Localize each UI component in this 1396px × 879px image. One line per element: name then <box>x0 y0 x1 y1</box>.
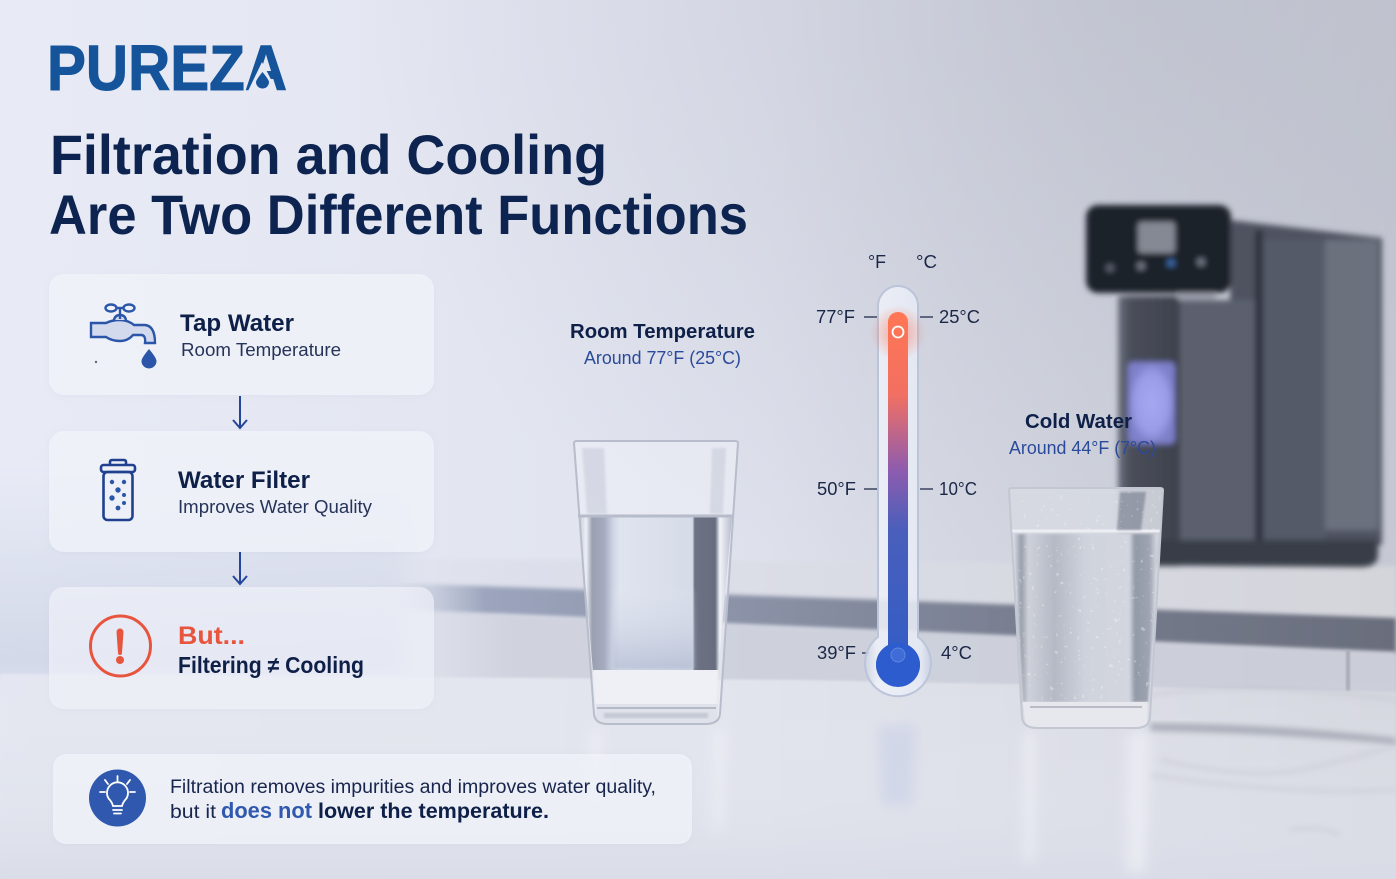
text: improves water quality: Improves Water Quality <box>178 497 372 517</box>
marble veins <box>1150 689 1396 835</box>
label: cold water: Around 44°F (7°C) <box>1009 438 1156 458</box>
blurred water dispenser appliance <box>1086 205 1382 567</box>
callout: filtration does not lower temperature: but it <box>170 802 217 823</box>
thermometer scale labels: 77°F <box>816 307 855 327</box>
label: room temperature: Room Temperature <box>570 321 755 343</box>
icon: warning exclamation <box>90 616 150 676</box>
heading: water filter: Water Filter <box>178 467 310 494</box>
thermometer scale labels: 25°C <box>939 307 980 327</box>
condensation droplets <box>1016 490 1160 700</box>
text: callout message: Filtration removes impurities and improves water quality, <box>170 777 656 798</box>
glass reflections <box>590 730 1150 872</box>
logo: PUREZA: PUREZA <box>47 32 287 104</box>
arrow: filter to warning <box>233 552 247 584</box>
label: cold water <box>1009 411 1156 458</box>
label: room temperature <box>570 321 755 368</box>
label: room temperature: Around 77°F (25°C) <box>584 348 741 368</box>
thermometer scale labels: 50°F <box>817 479 856 499</box>
panel: tap water <box>49 274 434 395</box>
heading: tap water: Tap Water <box>180 310 294 337</box>
thermometer scale labels: 10°C <box>939 479 977 499</box>
text: room temperature: Room Temperature <box>181 340 341 360</box>
callout: filtration does not lower temperature <box>53 754 692 844</box>
label: cold water: Cold Water <box>1025 411 1132 433</box>
title <box>49 123 748 246</box>
glass: cold water <box>1005 488 1165 728</box>
thermometer scale labels: 4°C <box>941 643 972 663</box>
thermometer scale labels: °C <box>916 252 937 272</box>
icon: light bulb <box>89 770 146 826</box>
callout: filtration does not lower temperature: lower the temperature. <box>318 800 549 823</box>
heading: but: But... <box>178 622 245 650</box>
thermometer glass tube <box>865 286 931 696</box>
glass: room temperature water <box>574 441 738 724</box>
text: filtering not equal cooling: Filtering ≠ Cooling <box>178 652 364 678</box>
icon: faucet <box>91 304 156 368</box>
thermometer scale labels: °F <box>868 252 886 272</box>
thermometer scale labels <box>816 252 980 663</box>
icon: filter cartridge <box>101 460 135 520</box>
title: Filtration and Cooling <box>50 123 607 186</box>
thermometer scale labels: 39°F <box>817 643 856 663</box>
thermometer mercury <box>876 312 920 687</box>
callout: filtration does not lower temperature: does not <box>221 798 313 823</box>
arrow: tap to filter <box>233 396 247 428</box>
icon: logo water drop <box>248 62 277 91</box>
panel: water filter <box>49 431 434 552</box>
panel: but filtering is not cooling <box>49 587 434 709</box>
title: Are Two Different Functions <box>49 183 748 246</box>
thermometer <box>816 252 980 696</box>
